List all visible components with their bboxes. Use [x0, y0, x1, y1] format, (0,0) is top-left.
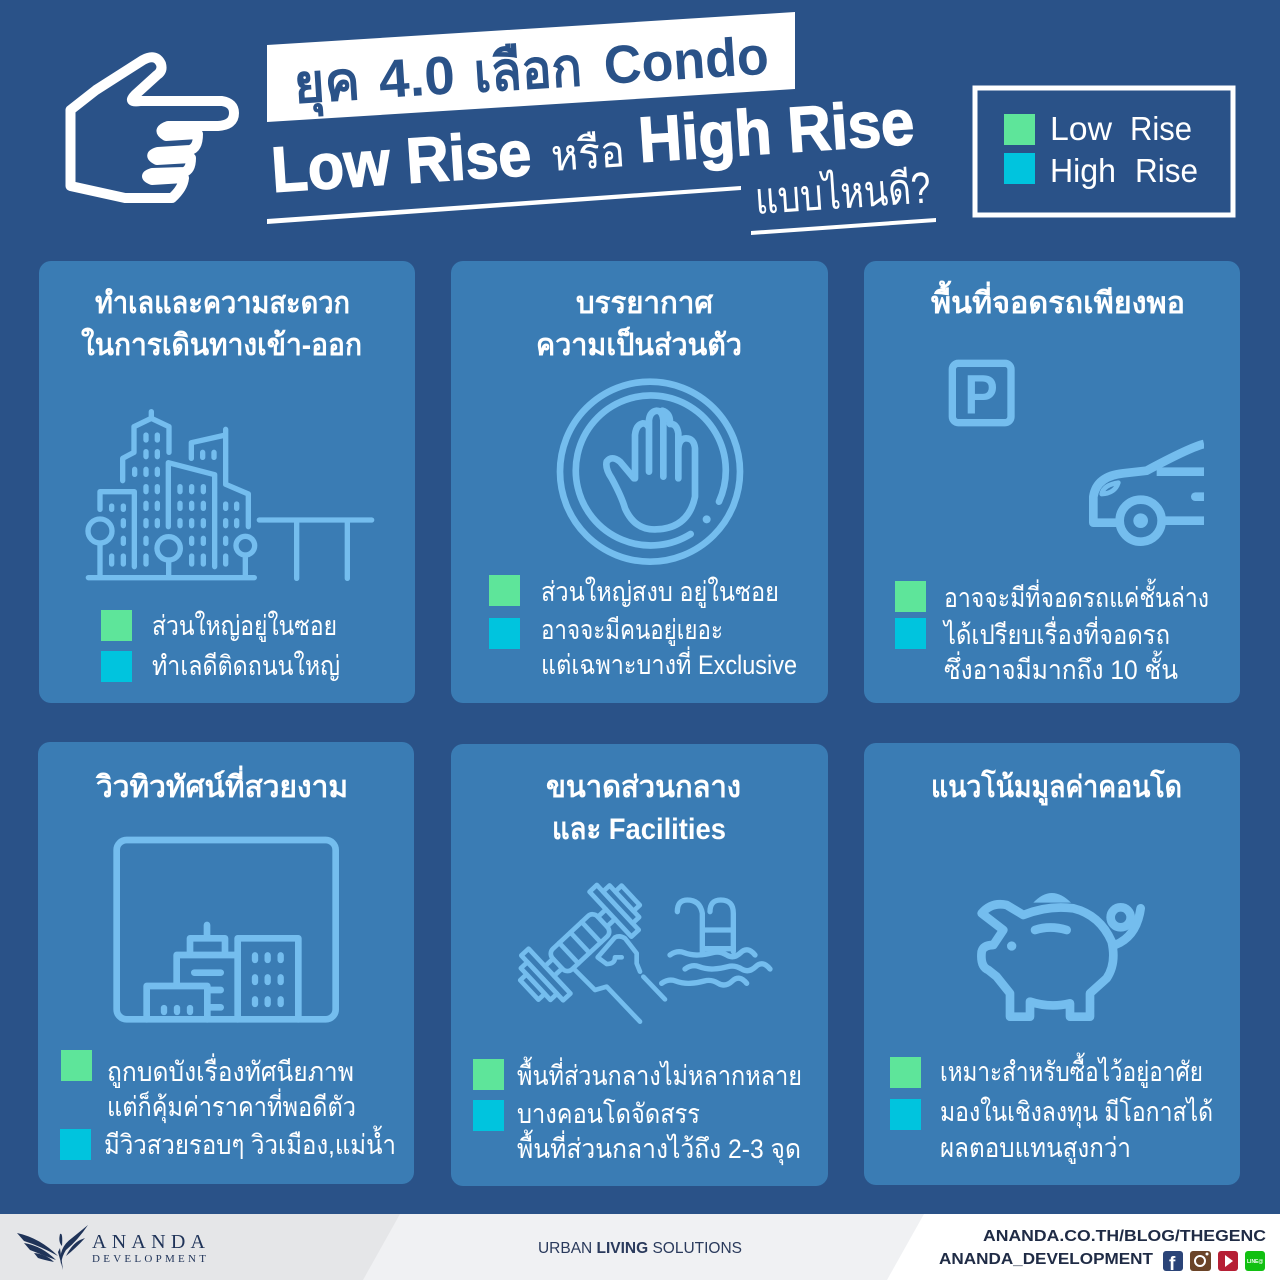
panel: common area and facilities: และ Facilities [552, 813, 726, 846]
icon: youtube [1218, 1251, 1238, 1271]
panel: atmosphere and privacy: ส่วนใหญ่สงบ อยู่ในซอย [541, 576, 779, 608]
icon: dumbbell and swimming pool [508, 873, 770, 1022]
title: low rise or high rise [267, 86, 916, 224]
panel: parking: อาจจะมีที่จอดรถแค่ชั้นล่าง [944, 578, 1209, 613]
panel: condo value trend: เหมาะสำหรับซื้อไว้อยู่อาศัย [940, 1052, 1203, 1088]
icon: window with buildings [117, 840, 336, 1019]
legend: Rise [1130, 110, 1192, 147]
panel: scenic view: มีวิวสวยรอบๆ วิวเมือง,แม่น้ำ [104, 1125, 396, 1160]
legend [975, 88, 1233, 215]
title banner: เลือก [472, 37, 584, 104]
panel: atmosphere and privacy: อาจจะมีคนอยู่เยอะ [541, 615, 723, 646]
logo: Ananda wings [17, 1225, 88, 1270]
subtitle: which one is better [751, 162, 936, 235]
panel: common area and facilities: พื้นที่ส่วนกลางไว้ถึง 2-3 จุด [517, 1129, 801, 1166]
legend: Rise [1135, 152, 1198, 189]
panel: atmosphere and privacy: แต่เฉพาะบางที่ Exclusive [541, 646, 797, 680]
panel: atmosphere and privacy [451, 261, 828, 703]
panel: condo value trend: มองในเชิงลงทุน มีโอกาสได้ [940, 1096, 1213, 1129]
icon: stop hand in circle [560, 382, 740, 562]
panel: condo value trend: แนวโน้มมูลค่าคอนโด [931, 768, 1182, 806]
panel: parking [864, 261, 1240, 703]
panel: parking: ซึ่งอาจมีมากถึง 10 ชั้น [944, 650, 1178, 685]
footer [0, 1214, 1280, 1280]
title banner [267, 12, 795, 122]
legend: High [1050, 152, 1116, 189]
title: low rise or high rise: High Rise [636, 86, 916, 176]
footer: ANANDA_DEVELOPMENT [939, 1251, 1153, 1268]
icon: instagram [1190, 1251, 1211, 1271]
panel: parking: ได้เปรียบเรื่องที่จอดรถ [942, 616, 1170, 650]
panel: condo value trend: ผลตอบแทนสูงกว่า [940, 1133, 1131, 1164]
title banner: Condo [602, 26, 770, 96]
panel: scenic view: วิวทิวทัศน์ที่สวยงาม [95, 765, 348, 804]
panel: atmosphere and privacy: บรรยากาศ [576, 287, 714, 320]
panel: common area and facilities: บางคอนโดจัดสรร [517, 1099, 700, 1129]
panel: location and convenience [39, 261, 415, 703]
panel: common area and facilities: ขนาดส่วนกลาง [546, 771, 741, 804]
subtitle: which one is better: แบบไหนดี? [753, 162, 932, 224]
panel: condo value trend [864, 743, 1240, 1185]
panel: common area and facilities [451, 744, 828, 1186]
icon: facebook [1163, 1251, 1183, 1275]
panel: atmosphere and privacy: ความเป็นส่วนตัว [536, 326, 742, 362]
icon: city buildings and road [88, 412, 372, 578]
title banner: 4.0 [377, 45, 457, 110]
panel: scenic view [38, 742, 414, 1184]
title: low rise or high rise: Low Rise [269, 117, 533, 206]
icon: facebook: f [1169, 1254, 1176, 1275]
title: low rise or high rise: หรือ [549, 127, 627, 181]
panel: location and convenience: ส่วนใหญ่อยู่ในซอย [152, 610, 337, 642]
panel: scenic view: ถูกบดบังเรื่องทัศนียภาพ [107, 1053, 354, 1088]
panel: common area and facilities: พื้นที่ส่วนกลางไม่หลากหลาย [517, 1056, 802, 1091]
panel: location and convenience: ทำเลดีติดถนนใหญ่ [152, 650, 340, 681]
footer: ANANDA [92, 1231, 206, 1253]
icon: parking sign and car [952, 363, 1204, 542]
footer: ANANDA.CO.TH/BLOG/THEGENC [983, 1228, 1266, 1245]
panel: location and convenience: ในการเดินทางเข้า-ออก [81, 327, 362, 362]
title banner: ยุค [292, 51, 362, 119]
icon: line: LINE@ [1247, 1259, 1263, 1265]
panel: scenic view: แต่ก็คุ้มค่าราคาที่พอดีตัว [107, 1088, 356, 1124]
icon: parking sign and car: P [964, 363, 998, 425]
footer: DEVELOPMENT [92, 1253, 206, 1265]
footer: URBAN LIVING SOLUTIONS [538, 1240, 742, 1257]
panel: parking: พื้นที่จอดรถเพียงพอ [931, 280, 1185, 320]
icon: line [1245, 1251, 1265, 1271]
icon: piggy bank [981, 893, 1141, 1017]
icon: pointing hand [70, 57, 234, 198]
panel: location and convenience: ทำเลและความสะดวก [95, 287, 350, 320]
legend: Low [1050, 110, 1112, 147]
